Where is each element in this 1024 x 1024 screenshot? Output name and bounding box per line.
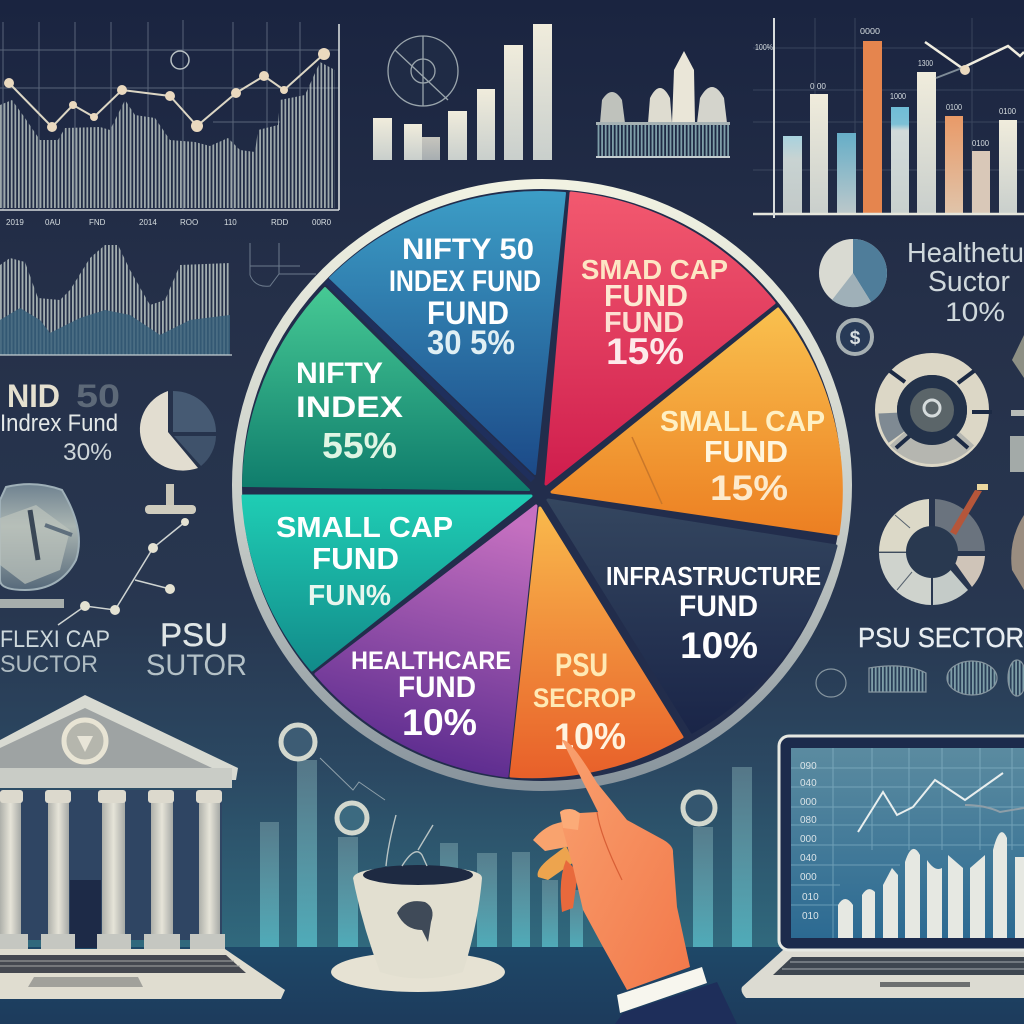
suit sleeve <box>615 982 737 1024</box>
left labels: PSU sector: SUTOR <box>146 649 247 682</box>
top-right bar chart: 0000 <box>860 27 881 36</box>
top-right bar chart: 1300 <box>918 59 933 68</box>
columns <box>0 790 225 949</box>
icon: segmented donut with pen <box>879 484 988 605</box>
connected circle icons <box>281 725 715 833</box>
palm and index finger <box>560 740 690 990</box>
slice: small cap fund orange: 15% <box>710 469 788 508</box>
slice: small cap fund teal: FUND <box>312 541 399 576</box>
bank building <box>0 695 238 949</box>
slice: healthcare fund: FUND <box>398 671 476 704</box>
slice: healthcare fund: HEALTHCARE <box>351 647 511 675</box>
slice: healthcare fund: 10% <box>402 702 477 743</box>
pie chart <box>237 184 847 786</box>
left laptop base <box>0 949 285 999</box>
roof <box>0 695 238 788</box>
top-right bar chart: 0100 <box>972 139 990 148</box>
top-left line and bar chart: FND <box>89 218 106 227</box>
screen: 040 <box>800 778 817 789</box>
slice: PSU sector: SECROP <box>533 683 636 713</box>
icon: globe circle <box>388 36 458 106</box>
left label: Nifty 50 index fund <box>0 378 120 466</box>
top-left line and bar chart: 2019 <box>6 218 24 227</box>
left labels: flexi cap sector: SUCTOR <box>0 651 98 678</box>
healthcare side panel: Healthetu <box>907 237 1024 268</box>
hand pointing at chart <box>533 740 737 1024</box>
slice: infrastructure fund: INFRASTRUCTURE <box>606 561 821 591</box>
left label: Nifty 50 index fund: Indrex Fund <box>0 410 118 437</box>
top-right bar chart: 0100 <box>946 103 962 112</box>
slice: Nifty 50 index fund: NIFTY 50 <box>402 233 534 266</box>
sketch icons under PSU sector <box>816 660 1024 697</box>
back fingers <box>533 822 572 851</box>
icon: glass bowl <box>0 484 79 608</box>
healthcare side panel: Suctor <box>928 266 1010 298</box>
screen: 090 <box>800 761 817 772</box>
slice: PSU sector: 10% <box>554 716 626 757</box>
left label: Nifty 50 index fund: NID <box>7 378 60 414</box>
slice: infrastructure fund: 10% <box>680 625 758 666</box>
slice: small cap fund orange: SMALL CAP <box>660 406 825 438</box>
right edge partial icons <box>1010 335 1024 590</box>
top-left line and bar chart: 110 <box>224 218 237 227</box>
top-right bar chart: 1000 <box>890 92 906 101</box>
screen: 000 <box>800 834 817 845</box>
slice: small cap fund teal: FUN% <box>308 580 391 612</box>
icon: coin: $ <box>850 328 861 349</box>
slice: Nifty index: NIFTY <box>296 357 383 390</box>
top-right bar chart: 100% <box>755 43 773 52</box>
slice: healthcare fund <box>316 506 536 776</box>
healthcare side panel: 10% <box>945 297 1005 327</box>
left label: Nifty 50 index fund: 50 <box>76 378 120 414</box>
top-centre skyline chart <box>596 51 730 158</box>
left label: Nifty 50 index fund: 30% <box>63 439 112 466</box>
left labels: flexi cap sector: FLEXI CAP <box>0 626 110 653</box>
top-left line and bar chart: RDD <box>271 218 289 227</box>
healthcare side panel <box>819 237 1024 354</box>
top-right bar chart: 0100 <box>999 107 1017 116</box>
screen: 000 <box>800 872 817 883</box>
slice: small cap fund red: 15% <box>606 331 684 372</box>
icon: segmented dial donut <box>886 364 992 456</box>
coffee cup <box>331 815 505 992</box>
top-centre bar chart with globe icon <box>373 24 552 160</box>
top-right bar chart <box>753 18 1024 218</box>
slice: Nifty 50 index fund: INDEX FUND <box>389 265 541 298</box>
slice: small cap fund red: FUND <box>604 278 688 313</box>
icon: coin <box>838 320 872 354</box>
slice: small cap fund teal <box>243 496 531 670</box>
slice: Nifty index: 55% <box>322 425 397 466</box>
desk <box>0 947 1024 1024</box>
slice: small cap fund orange: FUND <box>704 434 788 469</box>
slice: infrastructure fund <box>548 500 836 732</box>
slice: Nifty 50 index fund: FUND <box>427 295 509 331</box>
top-left line and bar chart: 00R0 <box>312 218 332 227</box>
slice: small cap fund teal: SMALL CAP <box>276 512 453 544</box>
shirt cuff <box>617 967 707 1013</box>
slice: PSU sector: PSU <box>555 647 608 683</box>
slice: Nifty index <box>243 288 529 490</box>
line chart with nodes <box>58 518 189 625</box>
slice: Nifty index: INDEX <box>296 391 403 424</box>
slice: PSU sector <box>511 508 682 777</box>
top-left line and bar chart: ROO <box>180 218 198 227</box>
top-right bar chart: 0 00 <box>810 82 827 91</box>
left labels: PSU sector: PSU <box>160 617 228 653</box>
screen: 010 <box>802 892 819 903</box>
top-left line and bar chart <box>0 20 339 227</box>
right laptop <box>742 736 1024 998</box>
left wave chart <box>0 245 232 355</box>
laptop screen bars <box>838 832 1024 938</box>
slice: small cap fund orange <box>552 309 841 534</box>
small schematic sketch <box>250 243 316 286</box>
screen: 000 <box>800 797 817 808</box>
icon: pie on stand <box>140 391 216 514</box>
screen: 040 <box>800 853 817 864</box>
left labels: flexi cap sector <box>0 626 110 678</box>
slice: small cap fund red: FUND <box>604 307 684 339</box>
slice: Nifty 50 index fund <box>330 192 565 474</box>
screen <box>791 748 1024 938</box>
slice: small cap fund red: SMAD CAP <box>581 254 728 285</box>
left labels: PSU sector <box>146 617 247 682</box>
slice: small cap fund red <box>546 193 774 484</box>
top-left line and bar chart: 2014 <box>139 218 157 227</box>
icon: small pie <box>819 239 887 307</box>
screen: 010 <box>802 911 819 922</box>
top-left line and bar chart: 0AU <box>45 218 61 227</box>
slice: Nifty 50 index fund: 30 5% <box>427 324 515 362</box>
background bars behind desk <box>260 760 752 948</box>
slice: infrastructure fund: FUND <box>679 590 758 623</box>
screen: 080 <box>800 815 817 826</box>
